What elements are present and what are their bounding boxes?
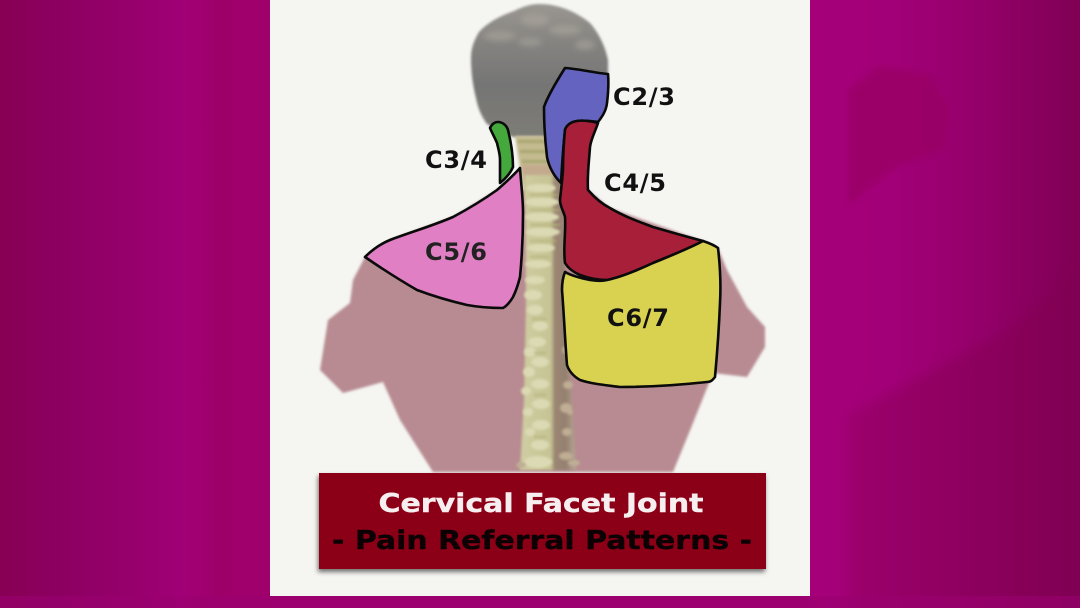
title line 1: Cervical Facet Joint: [378, 489, 704, 519]
region: C4/5 red: [560, 121, 703, 280]
region: C3/4 green: [490, 122, 513, 183]
region: C5/6 pink: [365, 168, 523, 308]
title banner: [319, 473, 766, 569]
title line 2: - Pain Referral Patterns -: [332, 526, 752, 556]
label: C2/3: C2/3: [613, 83, 675, 111]
label: C3/4: C3/4: [425, 146, 487, 174]
torso silhouette: [320, 190, 765, 472]
spine: [516, 175, 580, 470]
label: C4/5: C4/5: [604, 169, 666, 197]
neck: [515, 136, 566, 200]
label: C6/7: C6/7: [607, 304, 669, 332]
white panel: [270, 0, 810, 596]
background: bottom magenta strip: [0, 596, 1080, 608]
region: C6/7 yellow: [562, 241, 720, 387]
hair: [471, 4, 608, 137]
label: C5/6: C5/6: [425, 238, 487, 266]
background: right magenta band: [810, 0, 1080, 608]
figure: back of head, neck and torso: [320, 4, 765, 472]
region: C2/3 blue: [544, 68, 608, 183]
background: left magenta band: [0, 0, 270, 608]
